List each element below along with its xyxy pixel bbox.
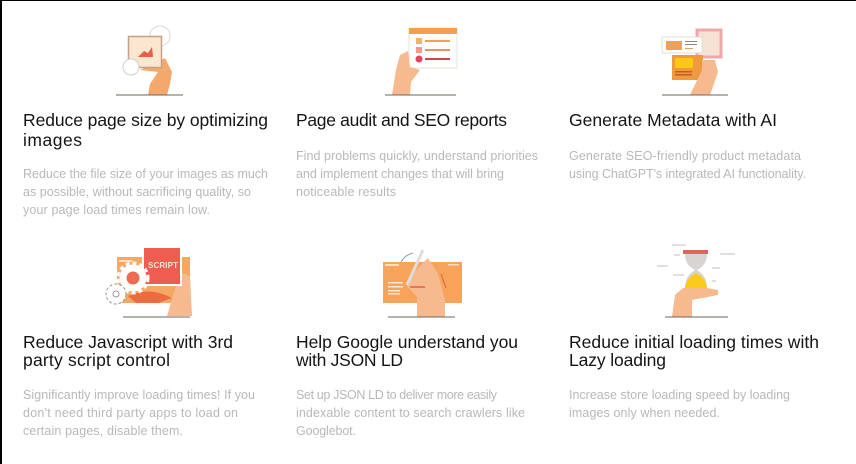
icon: hand holding image xyxy=(116,26,183,95)
icon: hand holding report window xyxy=(385,28,457,95)
text: lazy loading description: Increase store loading speed by loading xyxy=(569,388,790,402)
heading: lazy loading xyxy=(569,332,819,370)
heading: page audit: Page audit and SEO reports xyxy=(296,110,507,130)
panel: optimize images xyxy=(23,26,268,217)
panel: JSON LD xyxy=(295,250,525,438)
text: third party scripts description: don't need third party apps to load on xyxy=(23,406,238,420)
text: third party scripts description: Significantly improve loading times! If you xyxy=(23,388,255,402)
heading: JSON LD: Help Google understand you xyxy=(296,332,518,352)
text: third party scripts description xyxy=(23,388,255,438)
text: metadata description: Generate SEO-friendly product metadata xyxy=(569,149,801,163)
text: metadata description xyxy=(569,149,806,181)
icon: script window with gears xyxy=(106,247,192,317)
panel: metadata xyxy=(569,30,806,181)
icon: hand with pen over window xyxy=(383,250,462,317)
text: third party scripts description: certain pages, disable them. xyxy=(23,424,183,438)
text: optimize images description: your page load times remain low. xyxy=(23,203,210,217)
heading: optimize images: images xyxy=(23,130,82,150)
text: metadata description: using ChatGPT's integrated AI functionality. xyxy=(569,167,806,181)
text: JSON LD description xyxy=(296,388,525,438)
heading: third party scripts: Reduce Javascript with 3rd xyxy=(23,332,233,352)
icon: script window with gears: SCRIPT xyxy=(148,261,178,270)
heading: lazy loading: Lazy loading xyxy=(569,350,666,370)
text: page audit description: noticeable results xyxy=(296,185,396,199)
heading: optimize images: Reduce page size by optimizing xyxy=(23,110,268,130)
text: page audit description: Find problems quickly, understand priorities xyxy=(296,149,538,163)
heading: third party scripts: party script control xyxy=(23,350,170,370)
panel: page audit xyxy=(296,28,538,199)
heading: JSON LD: with JSON LD xyxy=(295,350,403,370)
text: optimize images description xyxy=(23,167,268,217)
icon: hand holding hourglass xyxy=(657,245,735,317)
text: optimize images description: as possible, without sacrificing quality, so xyxy=(23,185,251,199)
icon: hand holding metadata cards xyxy=(662,30,728,95)
text: lazy loading description xyxy=(569,388,790,420)
text: JSON LD description: Googlebot. xyxy=(296,424,356,438)
heading: metadata: Generate Metadata with AI xyxy=(569,110,777,130)
text: JSON LD description: indexable content to search crawlers like xyxy=(296,406,525,420)
text: JSON LD description: Set up JSON LD to deliver more easily xyxy=(296,388,498,402)
heading: third party scripts xyxy=(23,332,233,370)
heading: JSON LD xyxy=(295,332,518,370)
panel: third party scripts xyxy=(23,247,255,438)
text: page audit description xyxy=(296,149,538,199)
text: page audit description: and implement changes that will bring xyxy=(296,167,504,181)
heading: optimize images xyxy=(23,110,268,150)
heading: lazy loading: Reduce initial loading times with xyxy=(569,332,819,352)
panel: lazy loading xyxy=(569,245,819,420)
text: lazy loading description: images only when needed. xyxy=(569,406,720,420)
text: optimize images description: Reduce the file size of your images as much xyxy=(23,167,268,181)
